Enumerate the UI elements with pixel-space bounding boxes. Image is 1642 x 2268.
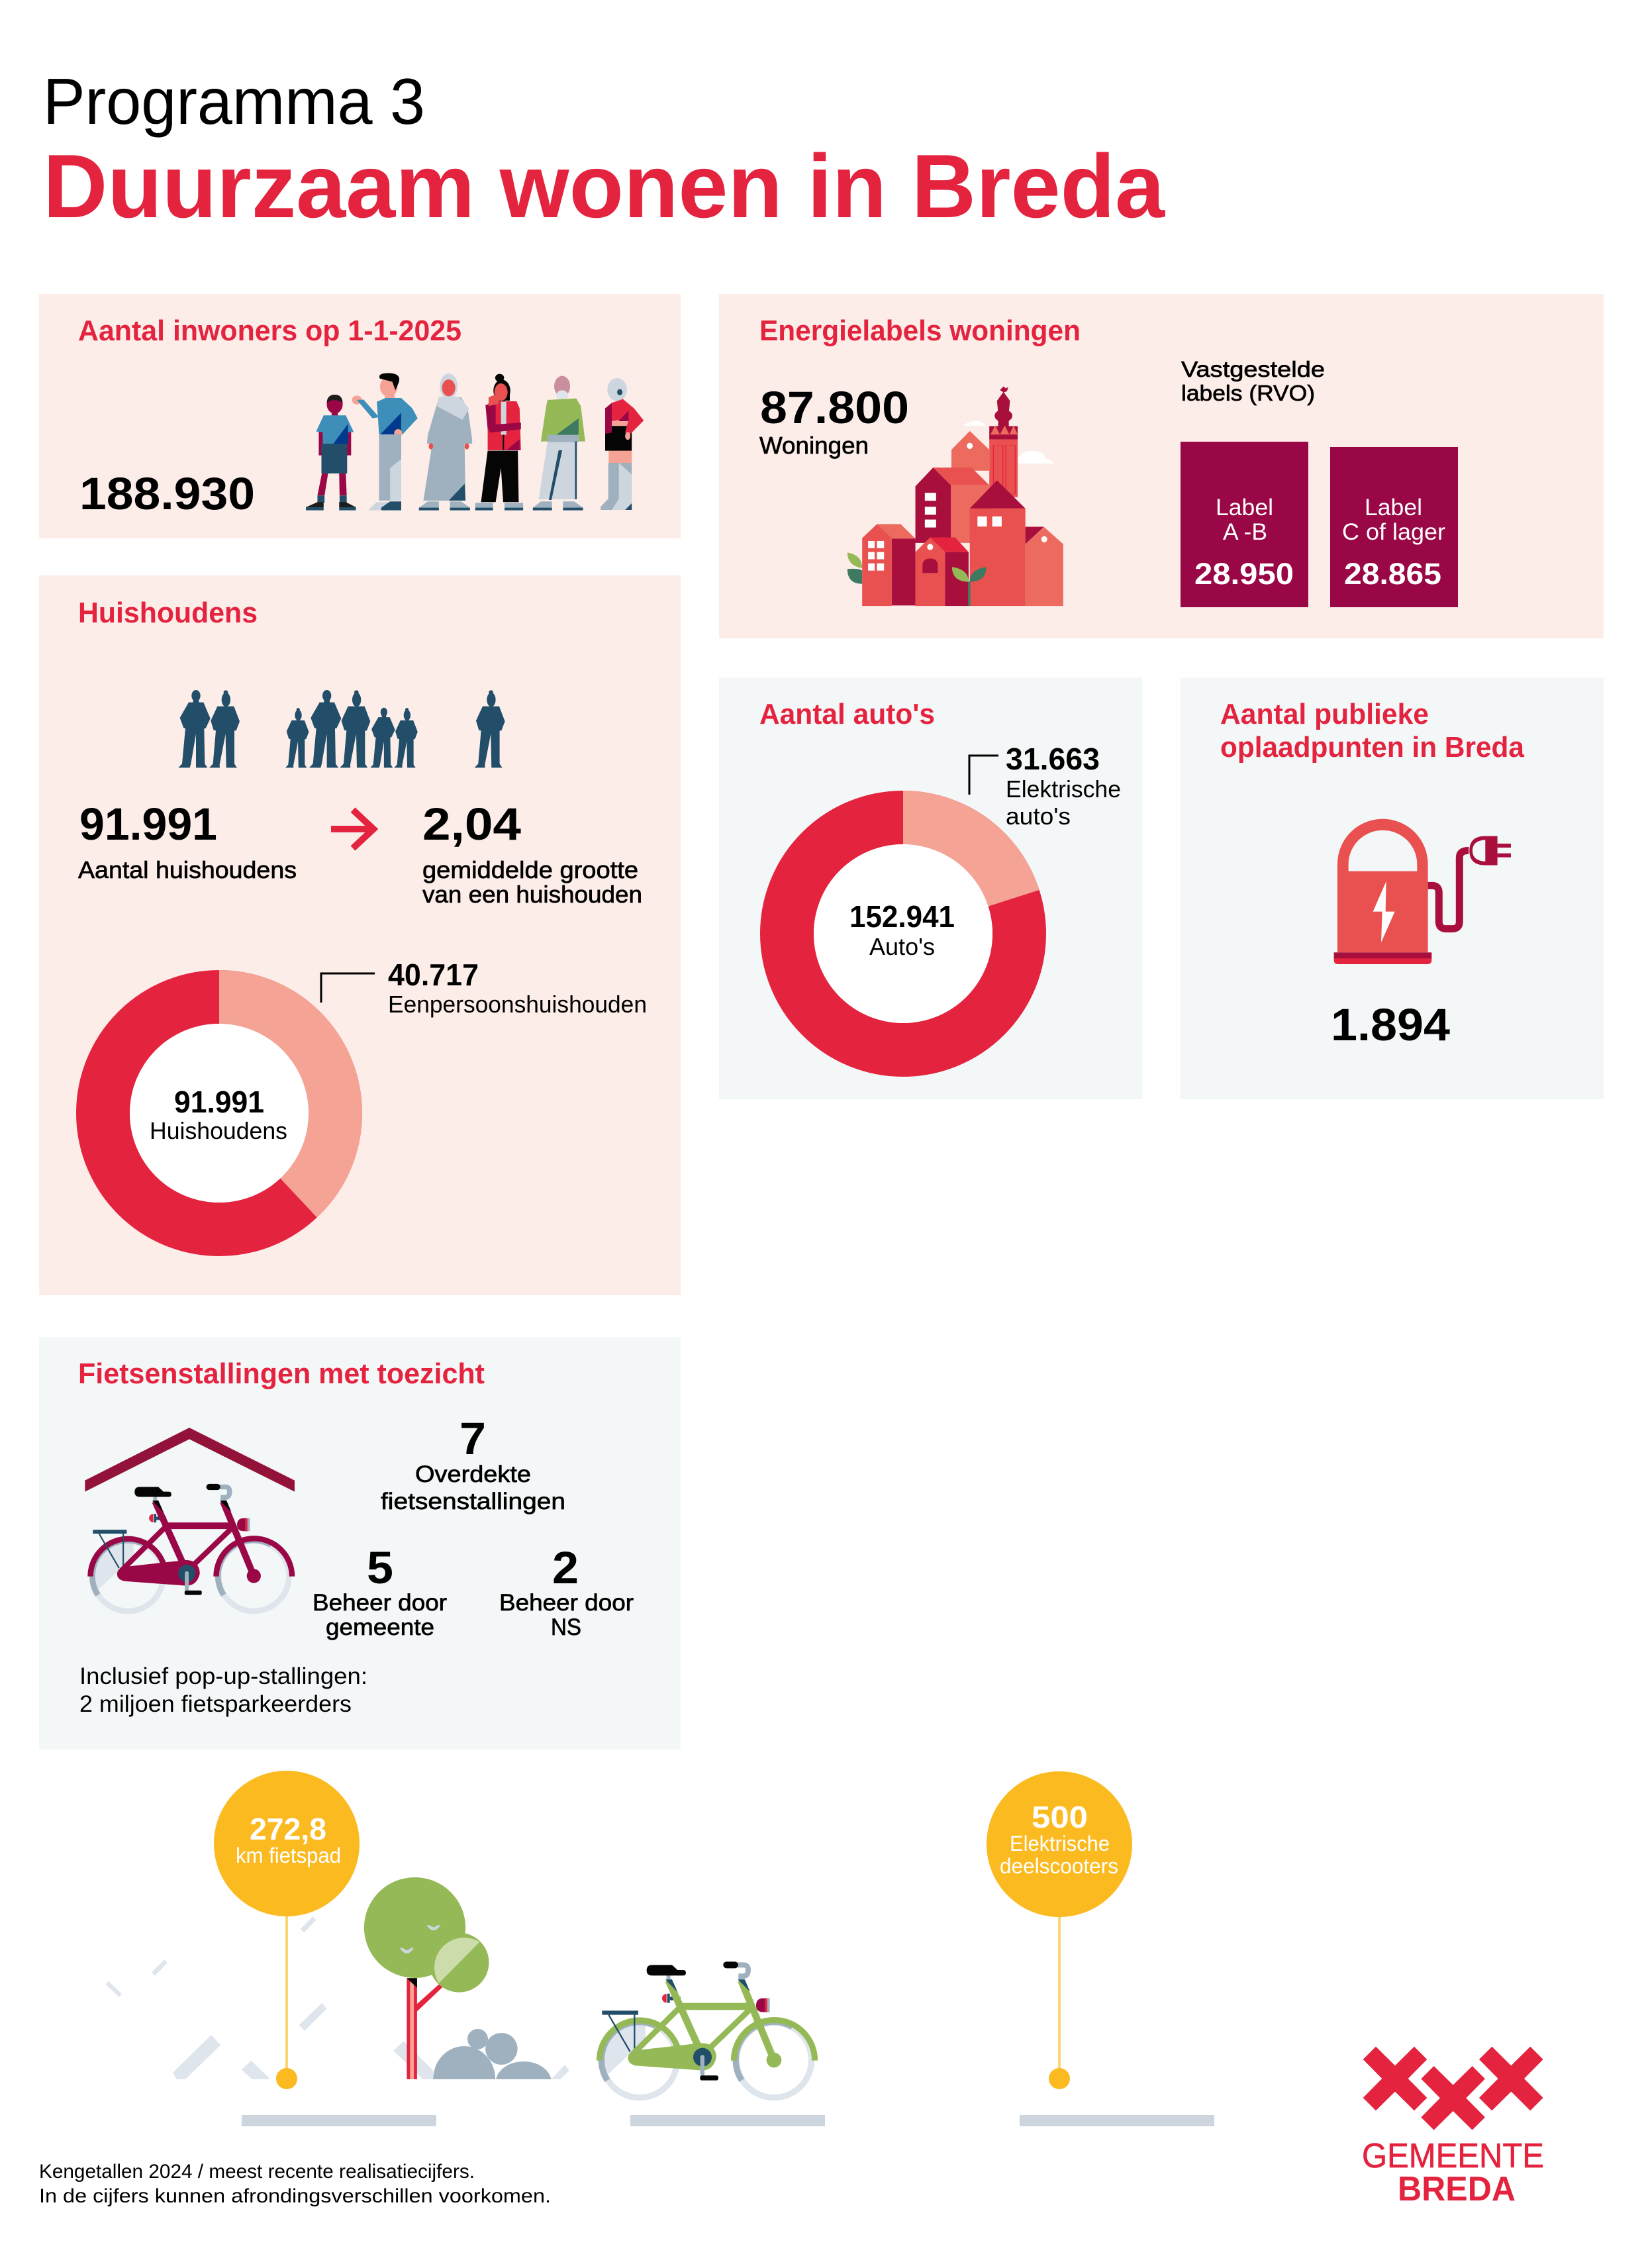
- title line: programma: Programma 3: [43, 65, 425, 138]
- marker: km fietspad: [214, 1771, 360, 2089]
- logo wordmark: BREDA: [1398, 2170, 1516, 2208]
- logo wordmark: GEMEENTE: [1362, 2137, 1544, 2175]
- icon: red bicycle: [91, 1484, 292, 1611]
- note: pop-up-stallingen: 2 miljoen fietsparkeerders: [79, 1691, 352, 1717]
- heading: energielabels: Energielabels woningen: [759, 315, 1081, 347]
- marker: km fietspad: km fietspad: [236, 1844, 341, 1867]
- callout: elektrische autos: Elektrische: [1006, 775, 1121, 803]
- logo crosses: [1363, 2047, 1543, 2130]
- label: gemiddelde grootte: van een huishouden: [422, 881, 642, 908]
- text: vastgestelde labels: Vastgestelde: [1181, 357, 1325, 381]
- icon: city with church tower: [847, 387, 1063, 606]
- donut chart: autos: 152.941: [849, 899, 955, 934]
- title: [43, 65, 1165, 236]
- box: label A-B: 28.950: [1194, 557, 1294, 591]
- donut chart: huishoudens: Huishoudens: [150, 1117, 287, 1144]
- heading: aantal autos: Aantal auto's: [759, 698, 935, 730]
- box: label A-B: A -B: [1223, 519, 1267, 545]
- title line: duurzaam wonen: Duurzaam wonen in Breda: [43, 136, 1165, 236]
- heading: oplaadpunten: Aantal publieke: [1220, 698, 1429, 730]
- note: pop-up-stallingen: [79, 1663, 367, 1717]
- number: inwoners: 188.930: [79, 468, 255, 519]
- label: gemiddelde grootte: [422, 856, 642, 908]
- heading: fietsenstallingen: Fietsenstallingen met toezicht: [78, 1357, 485, 1390]
- footnote: [39, 2161, 551, 2207]
- number: woningen: Woningen: [759, 432, 869, 459]
- stat: overdekte fietsenstallingen: fietsenstallingen: [381, 1489, 565, 1514]
- stat: beheer door gemeente: gemeente: [326, 1614, 434, 1640]
- old man with cane: [533, 376, 585, 511]
- callout: eenpersoonshuishouden: [321, 958, 647, 1018]
- woman in headscarf: [419, 373, 472, 511]
- panel: huishoudens: [39, 575, 681, 1295]
- panel: oplaadpunten: [1181, 677, 1604, 1099]
- heading: aantal inwoners: Aantal inwoners op 1-1-2025: [78, 315, 461, 347]
- marker: deelscooters: Elektrische: [1010, 1832, 1110, 1855]
- text: vastgestelde labels: [1181, 357, 1325, 405]
- label: aantal huishoudens: Aantal huishoudens: [78, 856, 297, 883]
- panel: aantal autos: [719, 677, 1142, 1099]
- box: label A-B: [1181, 442, 1308, 607]
- icon: green bicycle: [599, 1961, 815, 2098]
- marker: deelscooters: deelscooters: [1000, 1854, 1118, 1878]
- number: aantal huishoudens: 91.991: [79, 799, 217, 850]
- stat: beheer door gemeente: Beheer door: [313, 1590, 447, 1616]
- marker: deelscooters: [987, 1771, 1132, 2089]
- arrow: [331, 810, 373, 848]
- child: [306, 395, 356, 511]
- text: vastgestelde labels: labels (RVO): [1181, 381, 1315, 405]
- donut chart: huishoudens: 91.991: [174, 1085, 264, 1119]
- note: pop-up-stallingen: Inclusief pop-up-stallingen:: [79, 1663, 367, 1689]
- icon: roof: [85, 1428, 295, 1492]
- box: label C of lager: C of lager: [1342, 519, 1445, 545]
- woman with short skirt: [601, 378, 644, 510]
- donut chart: autos: Auto's: [869, 933, 935, 960]
- number: oplaadpunten: 1.894: [1331, 999, 1450, 1050]
- stat: overdekte fietsenstallingen: Overdekte: [415, 1461, 531, 1487]
- callout: elektrische autos: [969, 742, 1121, 830]
- icon: group of people: [306, 373, 644, 511]
- panel: fietsenstallingen: [39, 1337, 681, 1750]
- road dashes: [106, 1916, 569, 2079]
- logo: gemeente breda: [1362, 2047, 1544, 2208]
- icon: charging station: [1334, 819, 1511, 964]
- logo wordmark: [1362, 2137, 1544, 2208]
- stat: beheer door gemeente: [313, 1542, 447, 1640]
- stat: overdekte fietsenstallingen: [381, 1413, 565, 1514]
- stat: beheer door gemeente: 5: [367, 1542, 393, 1593]
- panel: aantal inwoners: [39, 294, 681, 538]
- box: label C of lager: 28.865: [1344, 557, 1441, 591]
- marker: deelscooters: 500: [1032, 1800, 1088, 1834]
- ground bars: [242, 2115, 1214, 2126]
- heading: oplaadpunten: oplaadpunten in Breda: [1220, 731, 1525, 764]
- donut chart: autos: [787, 817, 1020, 1050]
- heading: oplaadpunten: [1220, 698, 1525, 764]
- footnote: Kengetallen 2024 / meest recente realisatiecijfers.: [39, 2161, 475, 2183]
- callout: elektrische autos: 31.663: [1006, 742, 1100, 776]
- callout: eenpersoonshuishouden: 40.717: [388, 958, 479, 992]
- stat: beheer door NS: 2: [552, 1542, 579, 1593]
- woman in red jacket: [475, 374, 523, 511]
- footnote: In de cijfers kunnen afrondingsverschillen voorkomen.: [39, 2185, 551, 2207]
- marker: km fietspad: 272,8: [250, 1812, 326, 1846]
- callout: elektrische autos: auto's: [1006, 803, 1071, 830]
- box: label C of lager: [1330, 447, 1458, 607]
- icon: household silhouettes: [178, 690, 505, 767]
- box: label A-B: Label: [1216, 495, 1273, 520]
- number: gemiddelde grootte: 2,04: [422, 799, 521, 850]
- donut chart: huishoudens: [103, 997, 335, 1229]
- number: woningen: [759, 382, 909, 459]
- stat: overdekte fietsenstallingen: 7: [459, 1413, 486, 1464]
- icon: tree and bushes: [364, 1877, 552, 2079]
- number: woningen: 87.800: [760, 382, 909, 433]
- stat: beheer door NS: Beheer door: [499, 1590, 634, 1616]
- label: gemiddelde grootte: gemiddelde grootte: [422, 856, 638, 883]
- box: label C of lager: Label: [1365, 495, 1422, 520]
- man in blue: [352, 373, 418, 511]
- panel: energielabels: [719, 294, 1604, 638]
- stat: beheer door NS: [499, 1542, 634, 1640]
- callout: eenpersoonshuishouden: Eenpersoonshuishouden: [388, 991, 647, 1018]
- stat: beheer door NS: NS: [551, 1614, 581, 1640]
- heading: huishoudens: Huishoudens: [78, 597, 258, 629]
